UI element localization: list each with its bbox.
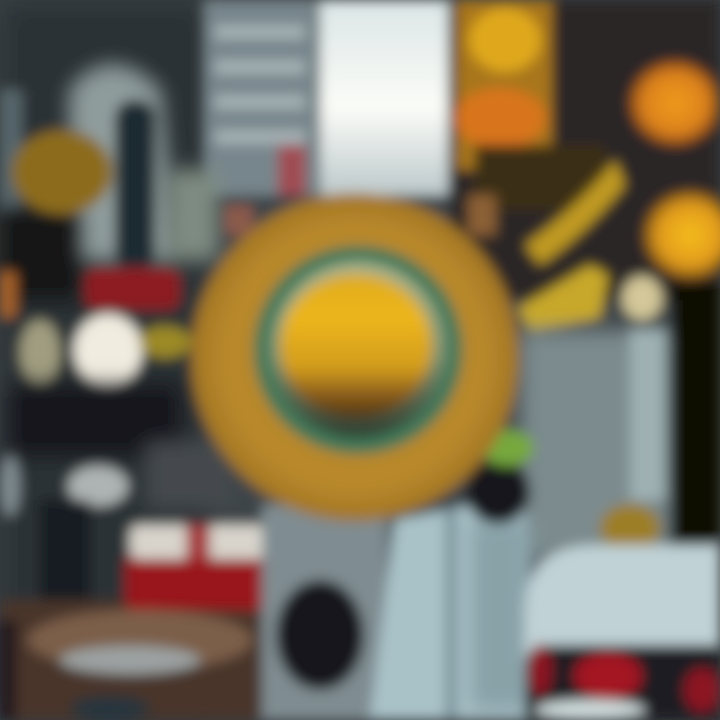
- bottom centre dark shape and pale column: [262, 430, 535, 720]
- right street scene: [450, 0, 720, 567]
- golden ring: [191, 193, 519, 521]
- green inner ring: [254, 246, 462, 454]
- inner recess: [270, 262, 446, 438]
- left street scene: [0, 0, 235, 720]
- bottom right white vehicle with red lights: [525, 545, 720, 720]
- building with pale stripes: [168, 0, 317, 260]
- outer gold ring: [191, 193, 519, 521]
- bottom left red and white awning: [0, 525, 275, 720]
- golden coin centre: [280, 274, 432, 418]
- bright sky gap: [320, 0, 448, 195]
